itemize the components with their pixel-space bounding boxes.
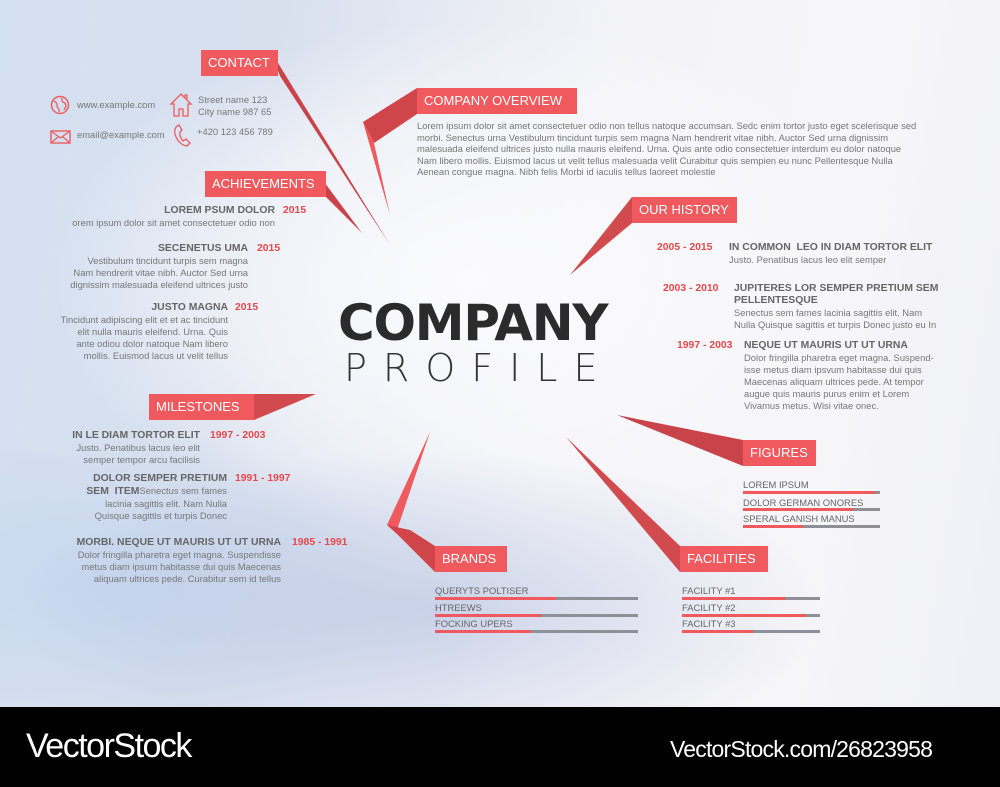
milestones list (72, 430, 348, 584)
contact block (50, 93, 273, 147)
text: overview: Aenean congue magna. Nibh felis Morbi id iaculis tellus laoreet molestie (417, 166, 716, 177)
facilities bars: FACILITY #3 (682, 618, 736, 629)
achievements list: 2015 (283, 205, 306, 216)
history list: Nulla Quisque sagittis et turpis Donec justo eu In (734, 319, 936, 330)
figures bars: SPERAL GANISH MANUS (743, 513, 855, 524)
text: website: www.example.com (77, 99, 155, 110)
pointer: achievements (316, 171, 362, 233)
milestones list: DOLOR SEMPER PRETIUM (93, 473, 227, 484)
label: figures: FIGURES (750, 445, 808, 460)
pointer: overview (363, 88, 417, 215)
history list: 2005 - 2015 (657, 242, 712, 253)
item 2: dignissim malesuada eleifend ultrices justo (70, 279, 248, 290)
text: overview: malesuada eleifend ultrices justo nulla mauris eleifend. Urna. Quis ante odio consectetuer interdum eu dolor natoque (417, 143, 901, 154)
label: facilities (680, 546, 768, 572)
label: company overview: COMPANY OVERVIEW (424, 93, 562, 108)
milestones list: semper tempor arcu facilisis (83, 454, 200, 465)
milestones list: Quisque sagittis et turpis Donec (95, 510, 227, 521)
footer url: VectorStock.com/26823958 (670, 736, 932, 762)
item 3 (60, 302, 228, 361)
title (338, 294, 613, 390)
history list: augue quis mauris purus enim et Lorem (744, 388, 909, 399)
label: facilities: FACILITIES (687, 551, 756, 566)
achievements list: 2015 (257, 243, 280, 254)
milestones list: Justo. Penatibus lacus leo elit (76, 442, 200, 453)
history list: Maecenas aliquam ultrices pede. At tempor (744, 376, 924, 387)
label: our history (632, 197, 737, 223)
history list: Senectus sem fames lacinia sagittis elit. Nam (734, 307, 922, 318)
pointer: contact (270, 50, 390, 245)
label: achievements (205, 171, 326, 197)
title: PROFILE (344, 346, 613, 390)
label: milestones: MILESTONES (156, 399, 240, 414)
label: figures (743, 440, 816, 466)
label: contact: CONTACT (208, 55, 270, 70)
history list: Vivamus metus. Wisi vitae onec. (744, 400, 879, 411)
milestones list: 1997 - 2003 (210, 430, 265, 441)
milestones list: metus diam ipsum habitasse dui quis Maecenas (81, 561, 281, 572)
facilities bars: FACILITY #1 (682, 585, 736, 596)
item 3: ante odiou dolor natoque Nam libero (76, 338, 228, 349)
title: COMPANY (338, 294, 607, 352)
label: our history: OUR HISTORY (639, 202, 729, 217)
figures bars (743, 479, 880, 528)
label: brands: BRANDS (442, 551, 496, 566)
pointer: facilities (566, 437, 680, 572)
milestones list: MORBI. NEQUE UT MAURIS UT UT URNA (77, 537, 281, 548)
text: overview: morbi. Senectus urna Vestibulum tincidunt turpis sem magna Nam hendrerit vitae nibh. Auctor Sed urna dignissim (417, 132, 888, 142)
milestones list: aliquam ultrices pede. Curabitur sem id tellus (94, 573, 281, 584)
history list: isse metus diam ipsvum habitasse dui quis (744, 364, 922, 375)
footer brand: VectorStock (26, 727, 191, 765)
item 3: Tincidunt adipiscing elit et et ac tincidunt (61, 314, 228, 325)
history list: Justo. Penatibus lacus leo elit semper (729, 254, 886, 265)
item 3: mollis. Euismod lacus ut velit tellus (84, 350, 228, 361)
history list: JUPITERES LOR SEMPER PRETIUM SEM PELLENTESQUE (734, 283, 938, 306)
label: brands (435, 546, 507, 572)
pointer: figures (617, 415, 743, 466)
text: overview (417, 120, 916, 177)
label: milestones (149, 394, 254, 420)
text: phone: +420 123 456 789 (197, 126, 273, 137)
label: company overview (417, 88, 577, 114)
pointer: milestones (254, 394, 316, 420)
item 1: LOREM PSUM DOLOR (164, 205, 275, 216)
history list (657, 242, 938, 411)
item 1: orem ipsum dolor sit amet consectetuer odio non (72, 217, 275, 228)
text: address: City name 987 65 (198, 106, 271, 117)
history list: 1997 - 2003 (677, 340, 732, 351)
pointer: history (570, 197, 632, 275)
item 2: Nam hendrerit vitae nibh. Auctor Sed urna (73, 267, 248, 278)
pointer: brands (387, 432, 435, 572)
item 3: elit nulla mauris eleifend. Urna. Quis (77, 326, 228, 337)
brands bars: HTREEWS (435, 602, 482, 613)
milestones list: Dolor fringilla pharetra eget magna. Suspendisse (78, 549, 281, 560)
milestones list: SEM ITEMSenectus sem fames (86, 485, 227, 497)
item 1 (72, 205, 275, 228)
icon: phone (174, 124, 191, 147)
milestones list: 1985 - 1991 (292, 537, 347, 548)
facilities bars (682, 585, 820, 633)
brands bars: QUERYTS POLTISER (435, 585, 528, 596)
achievements list (60, 205, 306, 361)
item 3: JUSTO MAGNA (151, 302, 228, 313)
item 2: Vestibulum tincidunt turpis sem magna (88, 255, 248, 266)
label: contact (201, 50, 278, 76)
history list: NEQUE UT MAURIS UT UT URNA (744, 340, 908, 351)
milestones list: lacinia sagittis elit. Nam Nulla (105, 498, 227, 509)
brands bars: FOCKING UPERS (435, 618, 513, 629)
history list: Dolor fringilla pharetra eget magna. Suspend- (744, 352, 934, 363)
icon: globe (50, 96, 70, 114)
milestones list: 1991 - 1997 (235, 473, 290, 484)
figures bars: LOREM IPSUM (743, 479, 809, 490)
achievements list: 2015 (235, 302, 258, 313)
icon: mail (50, 130, 71, 144)
brands bars (435, 585, 638, 633)
text: email: email@example.com (77, 129, 165, 140)
facilities bars: FACILITY #2 (682, 602, 736, 613)
item 2 (70, 243, 248, 290)
item 2: SECENETUS UMA (158, 243, 248, 254)
text: address: Street name 123 (198, 94, 267, 105)
text: overview: Lorem ipsum dolor sit amet consectetuer odio non tellus natoque accumsan. Sedc enim tortor justo eget scelerisque sed (417, 120, 916, 131)
history list: 2003 - 2010 (663, 283, 718, 294)
milestones list: IN LE DIAM TORTOR ELIT (72, 430, 200, 441)
label: achievements: ACHIEVEMENTS (212, 176, 315, 191)
history list: IN COMMON LEO IN DIAM TORTOR ELIT (729, 242, 932, 253)
figures bars: DOLOR GERMAN ONORES (743, 497, 863, 508)
text: address (198, 94, 272, 117)
icon: house (170, 93, 192, 117)
footer (0, 707, 1000, 787)
text: overview: Nam libero mollis. Euismod lacus ut velit tellus malesuada velit Curabitur quis sempien eu nunc Pellentesque Nulla (417, 154, 893, 166)
